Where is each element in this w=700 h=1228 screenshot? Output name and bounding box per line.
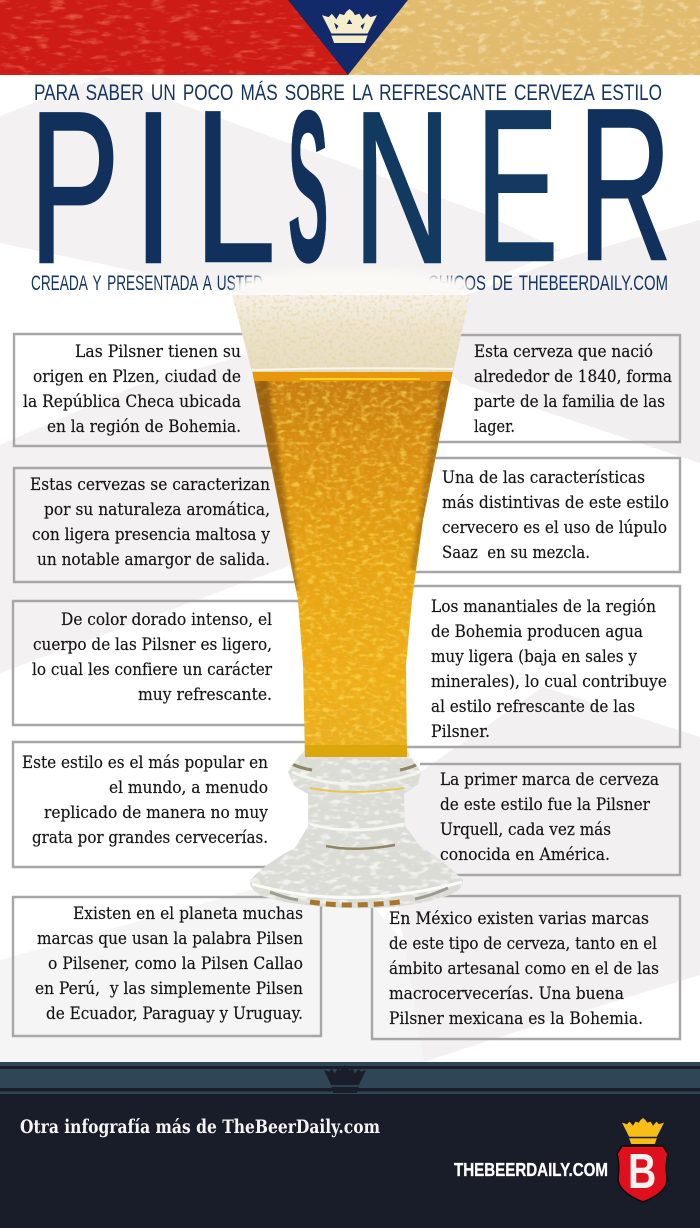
panel: brands worldwide: o Pilsener, como la Pilsen Callao xyxy=(48,954,303,974)
panel: Mexico: Pilsner mexicana es la Bohemia. xyxy=(389,1009,643,1029)
panel: birth xyxy=(425,335,680,442)
header banner xyxy=(0,0,700,75)
panel: birth: lager. xyxy=(474,417,515,437)
panel: popularity xyxy=(13,742,310,867)
panel: water: muy ligera (baja en sales y xyxy=(431,647,637,667)
panel: first brand xyxy=(420,764,680,875)
title: Pilsner: E xyxy=(476,66,558,307)
panel: popularity: Este estilo es el más popular en xyxy=(22,753,268,773)
illustration: pilsner glass xyxy=(230,269,475,915)
panel: aroma: un notable amargor de salida. xyxy=(37,550,270,570)
glass foot and stem xyxy=(250,750,463,908)
panel: origin xyxy=(14,334,270,446)
panel: origin: Las Pilsner tienen su xyxy=(75,342,241,362)
panel: aroma xyxy=(14,468,295,582)
footer xyxy=(0,1062,700,1228)
panel: first brand: Urquell, cada vez más xyxy=(440,820,611,840)
footer ribbon xyxy=(0,1062,700,1094)
panel: hops: Una de las características xyxy=(442,468,645,488)
panel: water xyxy=(400,586,680,747)
panel: hops xyxy=(410,458,680,572)
header navy triangle xyxy=(288,0,408,75)
panel: aroma: Estas cervezas se caracterizan xyxy=(30,475,270,495)
panel: water: al estilo refrescante de las xyxy=(431,697,635,717)
title: Pilsner: R xyxy=(578,64,672,305)
panel: popularity: grata por grandes cervecerías. xyxy=(32,828,268,848)
title: Pilsner: L xyxy=(194,67,276,308)
panel: birth: parte de la familia de las xyxy=(474,392,665,412)
icon: gold crown xyxy=(622,1118,664,1144)
panel: brands worldwide: Existen en el planeta muchas xyxy=(73,904,303,924)
panel: origin: en la región de Bohemia. xyxy=(47,417,241,437)
panel: Mexico: macrocervecerías. Una buena xyxy=(389,984,624,1004)
panel: brands worldwide: en Perú, y las simplemente Pilsen xyxy=(35,979,303,999)
panel: origin: la República Checa ubicada xyxy=(23,392,241,412)
title: Pilsner: N xyxy=(353,68,451,309)
title: Pilsner: I xyxy=(133,68,174,309)
panel: origin: origen en Plzen, ciudad de xyxy=(33,367,241,387)
panel: Mexico: de este tipo de cerveza, tanto en el xyxy=(389,934,657,954)
panel: popularity: replicado de manera no muy xyxy=(44,803,268,823)
panel: water: minerales), lo cual contribuye xyxy=(431,672,667,692)
subheading: credit line: CREADA Y PRESENTADA A USTED xyxy=(31,272,263,295)
panel: Mexico xyxy=(372,896,680,1039)
header tan panel xyxy=(348,0,700,75)
icon: red shield logo xyxy=(617,1145,668,1202)
panel: first brand: de este estilo fue la Pilsner xyxy=(440,795,651,815)
panel: first brand: La primer marca de cerveza xyxy=(440,770,659,790)
panel: hops: más distintivas de este estilo xyxy=(442,493,669,513)
footer background xyxy=(0,1094,700,1228)
panel: Mexico: ámbito artesanal como en el de las xyxy=(389,959,659,979)
panel: brands worldwide: de Ecuador, Paraguay y Uruguay. xyxy=(46,1004,303,1024)
icon: red shield logo: B xyxy=(628,1145,656,1199)
title: Pilsner: P xyxy=(29,68,120,309)
panel: color: lo cual les confiere un carácter xyxy=(32,660,273,680)
panel: aroma: con ligera presencia maltosa y xyxy=(32,525,270,545)
panel: hops: cervecero es el uso de lúpulo xyxy=(442,518,667,538)
foam xyxy=(230,269,475,375)
footer credit: Otra infografía más de TheBeerDaily.com xyxy=(20,1116,380,1138)
panel: birth: alrededor de 1840, forma xyxy=(474,367,672,387)
title: Pilsner xyxy=(29,64,672,309)
panel: color: De color dorado intenso, el xyxy=(61,610,272,630)
panel: Mexico: En México existen varias marcas xyxy=(389,909,649,929)
footer brand name: THEBEERDAILY.COM xyxy=(454,1160,608,1180)
panel: hops: Saaz en su mezcla. xyxy=(442,543,590,563)
subheading: credit line xyxy=(31,272,668,295)
panel: brands worldwide: marcas que usan la palabra Pilsen xyxy=(37,929,303,949)
beer body xyxy=(250,368,456,760)
panel: popularity: el mundo, a menudo xyxy=(109,778,268,798)
panel: color: muy refrescante. xyxy=(138,685,272,705)
header red panel xyxy=(0,0,350,75)
panel: color: cuerpo de las Pilsner es ligero, xyxy=(33,635,272,655)
panel: birth: Esta cerveza que nació xyxy=(474,342,653,362)
icon: header crown xyxy=(322,9,377,43)
icon: footer crown xyxy=(324,1065,366,1093)
panel: brands worldwide xyxy=(13,897,321,1036)
panel: first brand: conocida en América. xyxy=(440,845,610,865)
panel: aroma: por su naturaleza aromática, xyxy=(44,500,270,520)
panel: water: de Bohemia producen agua xyxy=(431,622,643,642)
panel: water: Pilsner. xyxy=(431,722,490,742)
panel: color xyxy=(13,601,310,725)
panel: water: Los manantiales de la región xyxy=(431,597,656,617)
title: Pilsner: S xyxy=(288,65,328,307)
